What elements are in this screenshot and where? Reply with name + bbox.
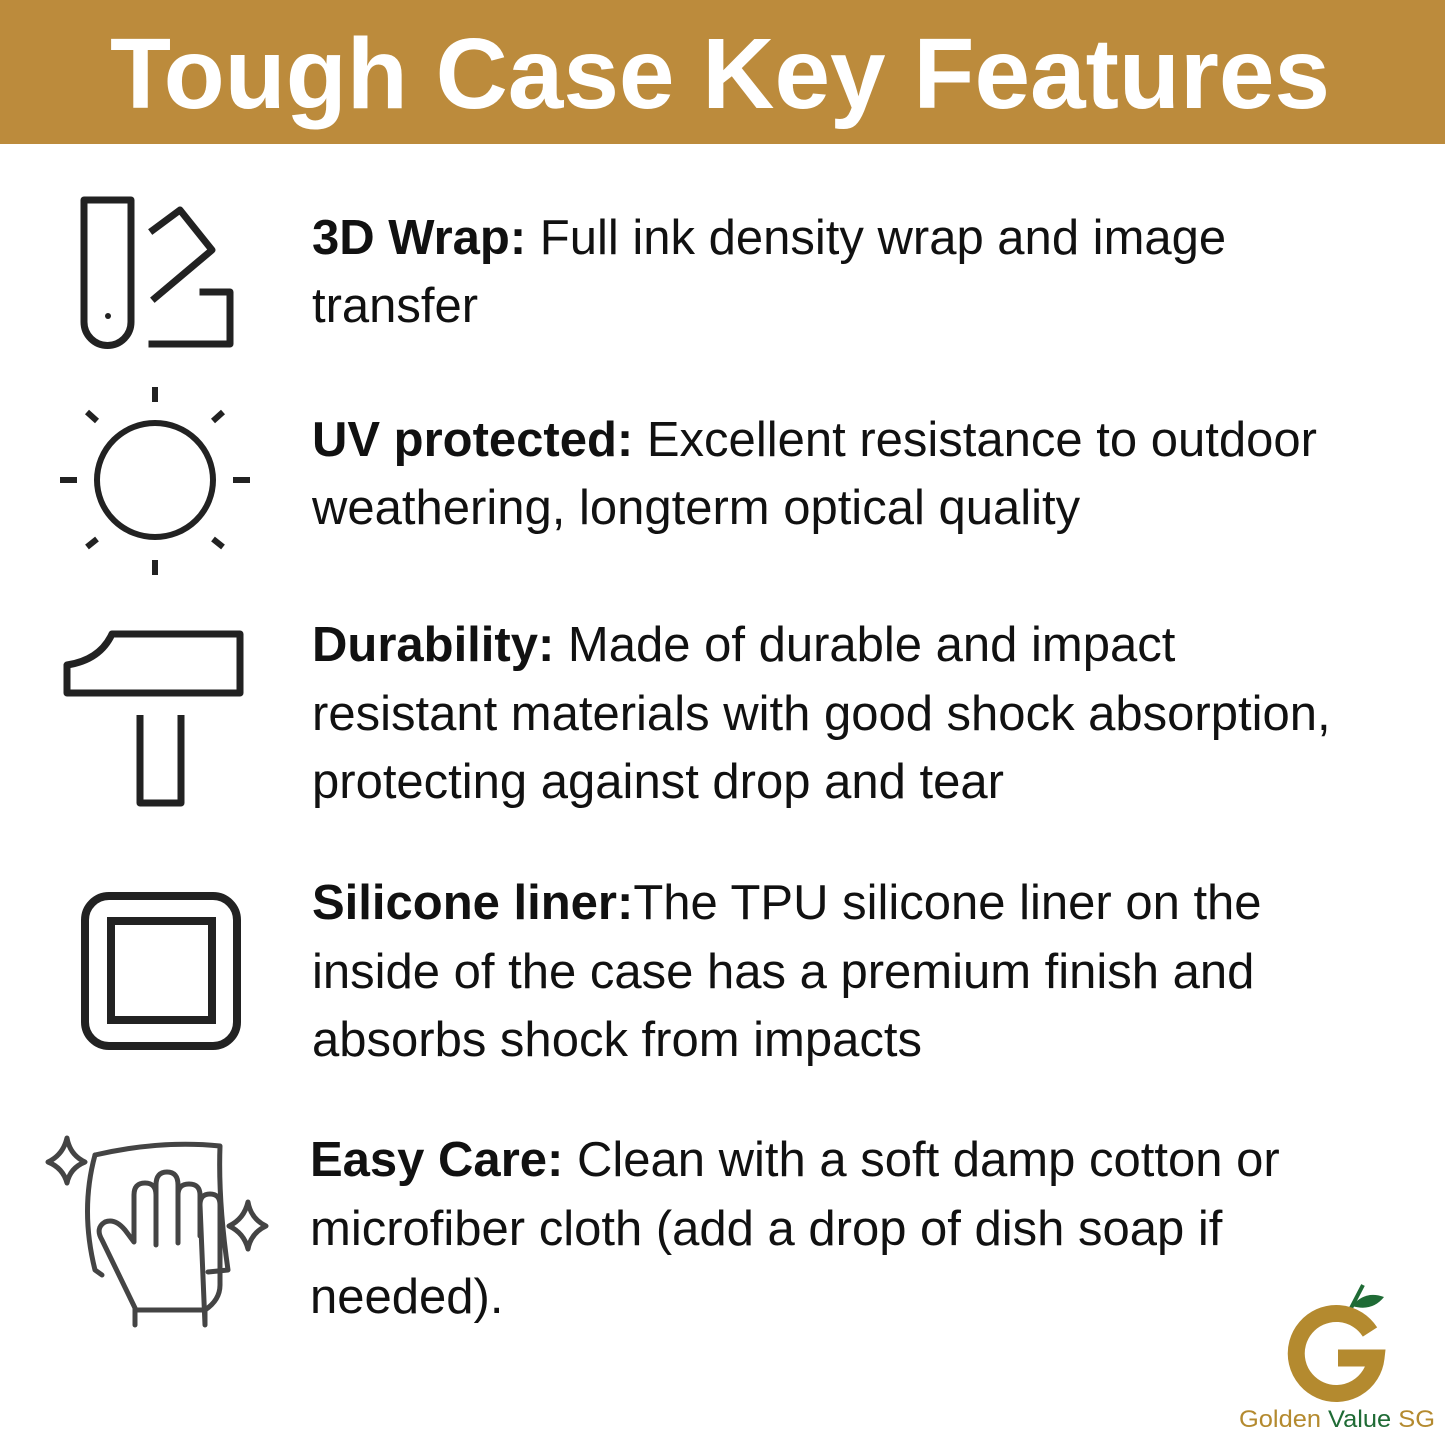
feature text: UV protected: weathering, longterm optical quality (311, 481, 1081, 535)
feature text: Easy Care: microfiber cloth (add a drop of dish soap if (310, 1202, 1223, 1256)
feature text: UV protected (311, 413, 1317, 535)
feature text: Silicone liner: Silicone liner:The TPU silicone liner on the (312, 876, 1262, 930)
feature text: 3D Wrap: 3D Wrap: Full ink density wrap and image (312, 211, 1226, 265)
icon: sun (60, 387, 250, 575)
feature text: UV protected: UV protected: Excellent resistance to outdoor (312, 413, 1317, 467)
feature text: Durability: protecting against drop and tear (312, 755, 1004, 809)
feature text: Silicone liner: inside of the case has a premium finish and (312, 945, 1254, 999)
feature text: 3D Wrap (312, 211, 1226, 333)
title: Tough Case Key Features (110, 18, 1330, 130)
logo: Golden Value SG: Golden Value SG (1239, 1406, 1435, 1433)
feature text: Easy Care: needed). (310, 1270, 503, 1324)
icon: 3D wrap (84, 200, 230, 346)
feature text: Durability: Durability: Made of durable and impact (312, 618, 1176, 672)
feature text: Durability (312, 618, 1331, 809)
icon: hammer (67, 634, 240, 803)
feature text: Silicone liner (312, 876, 1262, 1067)
feature text: Easy Care: Easy Care: Clean with a soft damp cotton or (310, 1133, 1280, 1187)
title banner (0, 0, 1445, 144)
feature text: Silicone liner: absorbs shock from impacts (312, 1013, 922, 1067)
feature text: Durability: resistant materials with good shock absorption, (312, 687, 1331, 741)
icon: silicone liner (85, 896, 237, 1046)
icon: hand cleaning (48, 1138, 266, 1325)
logo: Golden Value SG (1239, 1285, 1435, 1433)
feature text: 3D Wrap: transfer (312, 279, 478, 333)
feature text: Easy Care (310, 1133, 1280, 1324)
